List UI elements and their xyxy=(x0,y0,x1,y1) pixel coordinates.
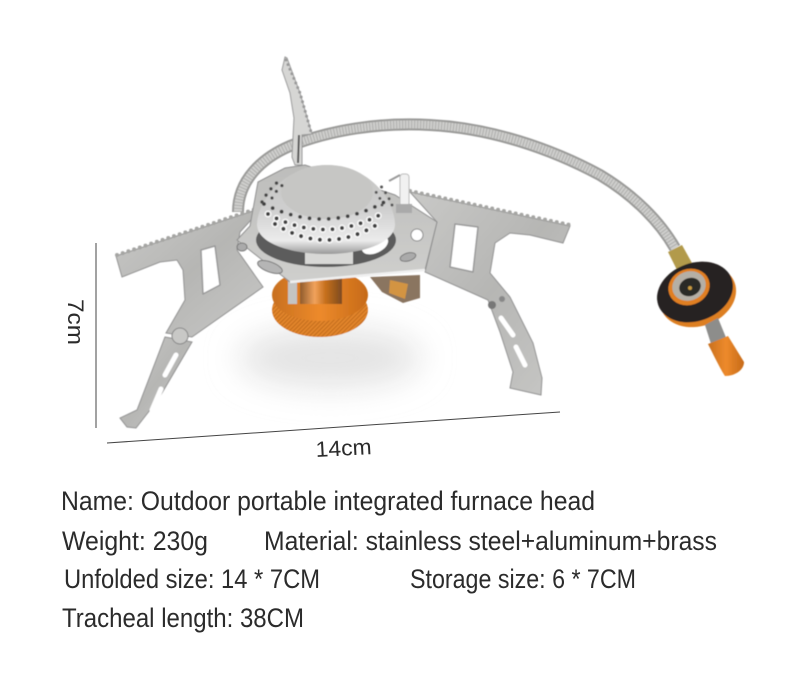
back pot support xyxy=(282,57,312,165)
gas canister connector xyxy=(648,251,745,338)
height dimension line xyxy=(95,243,97,428)
brass hose fitting xyxy=(668,245,692,270)
height label: 7cm xyxy=(63,299,88,345)
gas hose xyxy=(238,124,675,248)
tracheal length: Tracheal length: 38CM xyxy=(62,603,304,633)
left lower leg and foot xyxy=(120,328,192,428)
igniter xyxy=(389,174,412,213)
unfolded size: Unfolded size: 14 * 7CM xyxy=(64,564,320,594)
width dimension line xyxy=(107,412,560,443)
orange rim xyxy=(651,254,745,338)
burner plate xyxy=(237,165,437,282)
ground shadow xyxy=(238,328,422,388)
weight: Weight: 230g xyxy=(62,526,208,556)
width label: 14cm xyxy=(315,434,372,462)
specifications text xyxy=(61,486,717,633)
black disc xyxy=(648,251,742,333)
orange control knob xyxy=(272,269,368,337)
copper stem xyxy=(288,278,342,304)
right arm and leg xyxy=(410,191,570,395)
burner dome xyxy=(257,165,395,254)
stove illustration xyxy=(116,57,745,428)
brass bracket xyxy=(370,275,420,303)
valve and orange adjuster xyxy=(705,318,744,376)
product name: Name: Outdoor portable integrated furnace head xyxy=(61,486,595,516)
material: Material: stainless steel+aluminum+brass xyxy=(264,526,717,556)
burner holes xyxy=(262,180,392,240)
storage size: Storage size: 6 * 7CM xyxy=(410,564,636,594)
left arm and upper leg xyxy=(116,207,263,337)
